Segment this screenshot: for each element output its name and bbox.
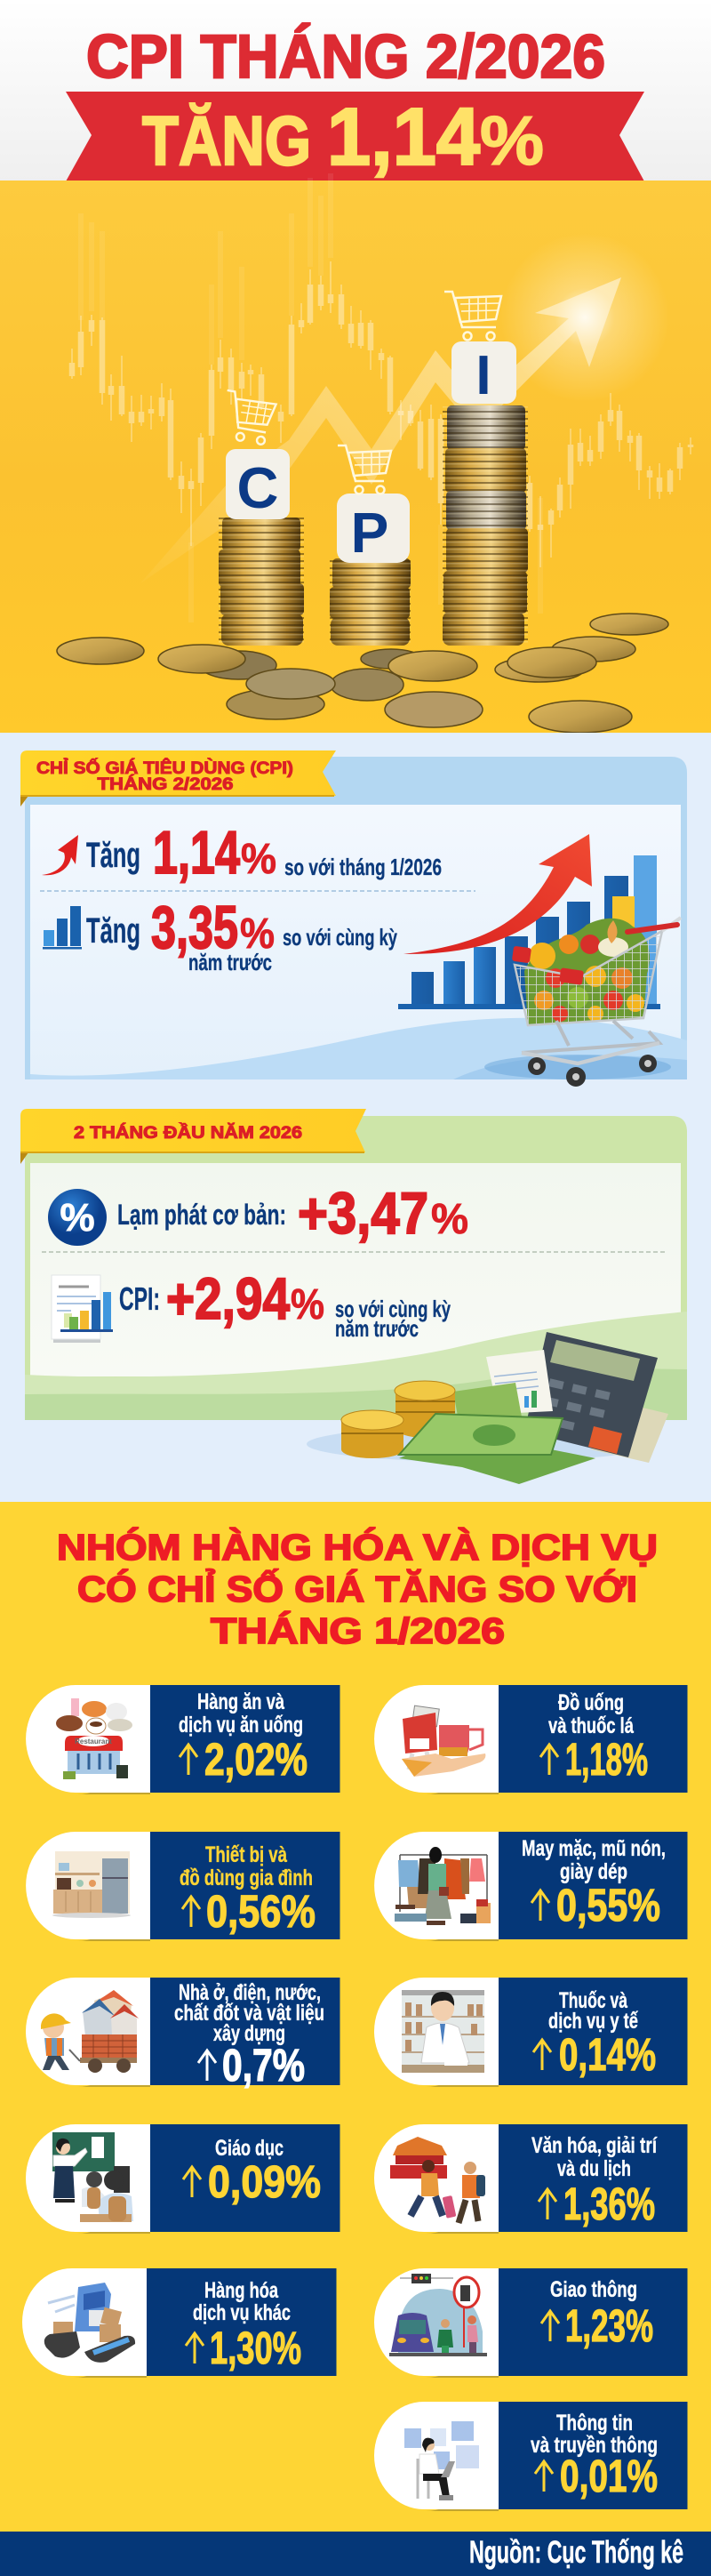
icon: clothing rack and shopper bbox=[395, 1847, 491, 1925]
icon: up arrow bbox=[42, 835, 78, 875]
card text bbox=[540, 1690, 648, 1785]
stat: CPI two months: CPI: bbox=[119, 1280, 160, 1317]
card text: Đồ uống bbox=[558, 1690, 624, 1715]
card text: dịch vụ ăn uống bbox=[179, 1713, 303, 1737]
card: clothing bbox=[374, 1832, 688, 1941]
die I: I bbox=[475, 345, 491, 406]
card text bbox=[522, 1836, 666, 1930]
stat: 1,14% bbox=[86, 819, 442, 887]
card text: Nhà ở, điện, nước, bbox=[179, 1980, 321, 2005]
card: food bbox=[26, 1685, 340, 1794]
shopping cart with produce bbox=[484, 918, 681, 1087]
die C bbox=[226, 449, 290, 520]
icon: worker, houses and bricks bbox=[41, 1990, 139, 2073]
stat: CPI two months: +2,94 bbox=[166, 1265, 290, 1331]
card text bbox=[174, 1980, 324, 2090]
red ribbon headline bbox=[66, 92, 644, 182]
panel: CPI February 2026 bbox=[20, 750, 687, 1087]
stat: 3,35%: năm trước bbox=[188, 949, 272, 975]
card: beverages and tobacco bbox=[374, 1685, 688, 1794]
red ribbon headline: TĂNG bbox=[142, 101, 311, 180]
ribbon: section heading bbox=[20, 1109, 366, 1164]
card: medicine and health bbox=[374, 1978, 688, 2087]
card text: 0,14% bbox=[559, 2029, 656, 2080]
icon: travellers at gate bbox=[390, 2137, 485, 2223]
card text bbox=[180, 1842, 316, 1937]
card text: Giáo dục bbox=[215, 2136, 284, 2161]
card: information and communications bbox=[374, 2402, 688, 2511]
section title: THÁNG 1/2026 bbox=[211, 1610, 505, 1651]
ribbon: section heading: 2 THÁNG ĐẦU NĂM 2026 bbox=[74, 1123, 302, 1143]
card text: 0,55% bbox=[556, 1880, 660, 1930]
stat: 3,35%: 3,35 bbox=[151, 894, 238, 961]
card text: 1,36% bbox=[563, 2179, 655, 2229]
card text: Thông tin bbox=[556, 2411, 633, 2436]
cart icon I bbox=[444, 292, 501, 340]
coin stack C bbox=[219, 518, 304, 646]
cart icon P bbox=[338, 445, 391, 494]
section title: CÓ CHỈ SỐ GIÁ TĂNG SO VỚI bbox=[77, 1569, 637, 1609]
card text: và thuốc lá bbox=[548, 1713, 634, 1738]
card text bbox=[179, 1689, 308, 1785]
stat: 1,14%: % bbox=[241, 836, 276, 883]
icon: classroom bbox=[52, 2132, 133, 2222]
card: household appliances bbox=[26, 1832, 340, 1941]
icon: restaurant: Restaurant bbox=[75, 1737, 112, 1745]
red ribbon headline: % bbox=[480, 101, 544, 180]
coin stack P bbox=[330, 558, 411, 646]
light blue section background bbox=[0, 733, 711, 1503]
header band bbox=[0, 0, 711, 181]
coin stack I bbox=[443, 405, 528, 646]
stat: core inflation: Lạm phát cơ bản: bbox=[117, 1199, 286, 1231]
card text: Giao thông bbox=[550, 2277, 637, 2302]
title: CPI THÁNG 2/2026 bbox=[86, 22, 605, 91]
card text: xây dựng bbox=[213, 2021, 285, 2046]
die C: C bbox=[237, 455, 278, 520]
icon: percent badge bbox=[48, 1189, 107, 1246]
stat: CPI two months bbox=[119, 1265, 451, 1342]
stat: 1,14%: Tăng bbox=[86, 836, 140, 875]
icon: pharmacist bbox=[402, 1990, 484, 2073]
stat: core inflation: +3,47 bbox=[298, 1180, 428, 1246]
red rising arrow bbox=[403, 834, 592, 954]
candlestick chart bbox=[72, 261, 691, 567]
stat: core inflation bbox=[117, 1180, 468, 1246]
section title bbox=[57, 1527, 658, 1651]
card text: 0,7% bbox=[222, 2040, 305, 2090]
card text: 1,18% bbox=[565, 1734, 648, 1785]
stat: 3,35%: Tăng bbox=[86, 911, 140, 951]
die P bbox=[337, 494, 410, 565]
ribbon: section heading: CHỈ SỐ GIÁ TIÊU DÙNG (CPI) bbox=[36, 758, 293, 778]
stat: CPI two months: so với cùng kỳ bbox=[335, 1296, 451, 1322]
die I bbox=[451, 341, 516, 406]
ribbon: section heading: THÁNG 2/2026 bbox=[98, 774, 233, 794]
card text: 1,23% bbox=[565, 2300, 653, 2351]
icon: factory machine bbox=[44, 2283, 135, 2363]
stat: 3,35% bbox=[86, 894, 397, 975]
icon: traffic scene bbox=[389, 2274, 487, 2356]
stat: 1,14%: 1,14 bbox=[153, 819, 240, 887]
icon: bar chart bbox=[43, 906, 82, 950]
icon: report document bbox=[52, 1275, 113, 1343]
scattered coins bbox=[57, 614, 668, 733]
card: education bbox=[26, 2124, 340, 2234]
stat: 3,35%: % bbox=[240, 911, 275, 958]
card text: 1,30% bbox=[210, 2323, 301, 2373]
stat: core inflation: % bbox=[431, 1196, 468, 1243]
card text bbox=[533, 1988, 656, 2080]
card text: 0,01% bbox=[560, 2451, 658, 2501]
background streaks bbox=[81, 173, 540, 622]
stat: CPI two months: % bbox=[291, 1281, 324, 1328]
card text: giày dép bbox=[560, 1859, 627, 1884]
stat: 1,14%: so với tháng 1/2026 bbox=[284, 854, 442, 880]
card text: dịch vụ y tế bbox=[548, 2009, 638, 2034]
card text: Thuốc và bbox=[559, 1988, 627, 2013]
card text: Hàng hóa bbox=[204, 2278, 279, 2303]
stat: 3,35%: so với cùng kỳ bbox=[283, 924, 397, 951]
rising arrow bbox=[140, 277, 621, 583]
money and calculator illustration bbox=[307, 1332, 668, 1484]
card text: và truyền thông bbox=[531, 2433, 658, 2458]
icon: woman with laptop and screens bbox=[404, 2421, 479, 2500]
card text: và du lịch bbox=[557, 2156, 631, 2181]
card text: đồ dùng gia đình bbox=[180, 1866, 313, 1890]
card text: chất đốt và vật liệu bbox=[174, 2001, 324, 2026]
card text bbox=[541, 2277, 653, 2351]
card text: dịch vụ khác bbox=[193, 2300, 291, 2325]
card text: Thiết bị và bbox=[205, 1842, 287, 1867]
card text: Hàng ăn và bbox=[197, 1689, 284, 1714]
card text bbox=[531, 2411, 658, 2501]
footer source bar bbox=[0, 2532, 711, 2576]
card text: 0,56% bbox=[206, 1886, 316, 1937]
card text: May mặc, mũ nón, bbox=[522, 1836, 666, 1861]
icon: drinks and cigarettes bbox=[402, 1705, 485, 1777]
bar chart illustration bbox=[398, 855, 660, 1009]
icon: kitchen bbox=[52, 1851, 131, 1918]
card text: 2,02% bbox=[204, 1734, 308, 1785]
card text bbox=[186, 2278, 301, 2373]
ribbon: section heading bbox=[20, 750, 336, 807]
red ribbon headline: 1,14 bbox=[327, 92, 480, 182]
panel: first two months of 2026 bbox=[20, 1109, 687, 1484]
stat: CPI two months: năm trước bbox=[335, 1315, 419, 1342]
card text: 0,09% bbox=[208, 2156, 321, 2207]
card: transport bbox=[374, 2268, 688, 2378]
card: culture and tourism bbox=[374, 2124, 688, 2234]
yellow section background bbox=[0, 1502, 711, 2532]
icon: restaurant bbox=[56, 1698, 132, 1779]
card text bbox=[183, 2136, 321, 2207]
icon: percent badge: % bbox=[60, 1196, 95, 1240]
card: housing and utilities bbox=[26, 1978, 340, 2090]
die P: P bbox=[351, 501, 388, 565]
card text: Văn hóa, giải trí bbox=[531, 2133, 658, 2158]
hero illustration: CPI dice on coin stacks bbox=[0, 173, 711, 734]
cart icon C bbox=[219, 390, 277, 445]
section title: NHÓM HÀNG HÓA VÀ DỊCH VỤ bbox=[57, 1527, 658, 1568]
card text bbox=[531, 2133, 658, 2229]
card: other goods and services bbox=[22, 2268, 337, 2378]
